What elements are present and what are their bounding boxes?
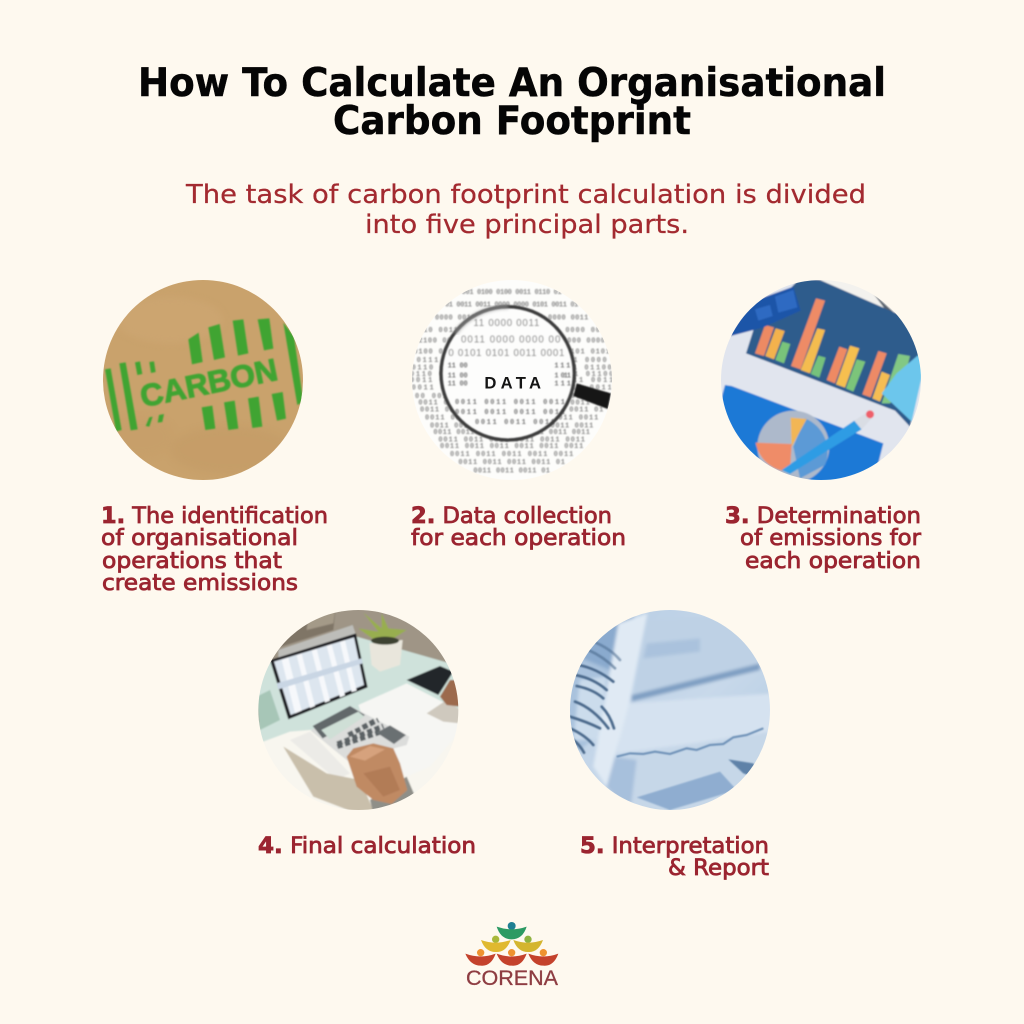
label 1: 1. The identification [101,504,328,529]
logo figures [465,922,558,966]
table header [637,772,737,810]
step 5 photo: blue financial report [570,610,770,810]
carbon stamp word: CARBON [137,352,281,414]
binary digit rows: 0110 0011 0011 0011 0011 0011 01100 [412,364,612,372]
step 2 photo: magnifier over data [412,280,612,480]
step 3 photo: charts on a desk [721,280,921,480]
magnifier [441,307,611,440]
binary digit rows [410,289,613,476]
binary digit rows: 0011 0011 0011 0011 0011 0011 0011 01 [418,400,605,408]
label 2 [411,504,626,551]
lens digits: 0011 0000 0000 00 [461,335,561,346]
label 2: 2. Data collection [411,504,612,529]
binary digit rows: 00 0011 0011 0011 0011 0011 0011 00 [415,393,608,401]
label 5 [580,834,769,881]
lens digits: 1 011 [554,372,571,380]
binary digit rows: 0011 0011 0011 01 [473,468,550,476]
label 1: operations that [102,549,282,574]
calculator [728,287,801,337]
bar chart [755,298,910,403]
title [138,61,886,144]
label 1: of organisational [101,526,298,551]
subtitle: into five principal parts. [365,210,689,240]
binary digit rows: 0011 0011 0011 0011 0011 0011 0011 01 [420,406,603,414]
plant leaves [358,613,407,645]
plant pot [369,640,403,672]
step 1 photo: carbon cardboard [100,277,307,483]
lens digits: 1 1 1 [554,362,570,370]
lens digits: 11 00 [448,362,468,370]
pencil [782,421,862,474]
lens digits: 1 1 1 [554,381,571,389]
subtitle: The task of carbon footprint calculation is divided [185,180,866,210]
notebook page [570,659,610,751]
step 4 photo: calculator and tablet on desk [258,610,458,810]
phone [407,666,453,695]
binary digit rows: 0011 0011 0011 0011 0011 0011 0011 [433,429,590,437]
binary digit rows: 0011 0011 0011 0011 0011 [450,451,573,459]
binary digit rows: 10 0011 0011 0000 0000 0011 0000 00 [423,327,600,335]
label 4: 4. Final calculation [258,834,476,859]
label 5: & Report [668,856,769,881]
label 3: 3. Determination [725,504,921,529]
binary digit rows: 0011 0011 0011 0011 0011 0011 [438,436,585,444]
binary digit rows: 0100 0101 0101 0101 0011 0011 0101 0101 [413,348,610,356]
binder papers [358,683,443,724]
binary digit rows: 0011 0011 0011 0011 0011 0011 0011 [412,384,612,392]
pie chart [756,411,829,483]
label 3: each operation [745,549,921,574]
label 2: for each operation [411,526,626,551]
lens digits: 0 0101 0101 0011 0001 [448,348,565,359]
label 3 [725,504,922,574]
logo wordmark: CORENA [466,967,558,990]
binary digit rows: 001 0100 0100 0011 0110 01 [462,289,562,297]
binary digit rows: 2100 0011 0011 0000 0000 0011 0000 0000 [418,338,605,346]
logo: Corena [465,922,558,990]
title: Carbon Footprint [333,99,691,144]
binary digit rows: 0011 0011 0011 0011 0011 0011 0011 [425,414,598,422]
lens digits: 0011 0011 0011 0011 [455,399,565,407]
lens digits: 11 0000 0011 [473,318,540,329]
binary digit rows: 0000 0011 0011 0000 0011 0000 0011 [435,314,588,322]
title: How To Calculate An Organisational [138,61,886,106]
pen tip [728,758,754,775]
label 1: create emissions [102,571,298,596]
binary digit rows: 0011 0011 0011 0011 0011 0011 0011 [430,422,593,430]
label 5: 5. Interpretation [580,834,769,859]
binary digit rows: 0011 0011 0011 0011 0011 0011 [440,443,583,451]
lens digits [448,318,571,427]
DATA label: DATA [484,373,541,392]
binary digit rows: 01 0011 0011 0000 0000 0101 0011 01 [445,302,578,310]
calculator [311,712,410,760]
hand at right [440,680,460,707]
binary digit rows: 0011 0011 0011 0011 01 [458,459,565,467]
subtitle [185,180,866,240]
line chart [617,728,763,757]
lens digits: 11 00 [448,381,468,389]
label 3: of emissions for [740,526,922,551]
lens digits: 0011 0011 0011 0011 [455,409,565,417]
tablet [270,625,368,719]
binary digit rows: 0111 0011 0011 001 0011 0011 0000 [417,357,607,365]
binary digit rows: 0110 0011 0011 0011 0011 0011 01100 [410,371,613,379]
calculating hand [347,743,407,804]
lens digits: 11 00 [448,372,468,380]
label 1 [101,504,328,596]
lens digits: 0011 0011 0011 [475,419,555,427]
spiral binding [570,642,620,753]
binary digit rows: 0011 0011 0011 0011 0011 0011 0011 [410,377,613,385]
